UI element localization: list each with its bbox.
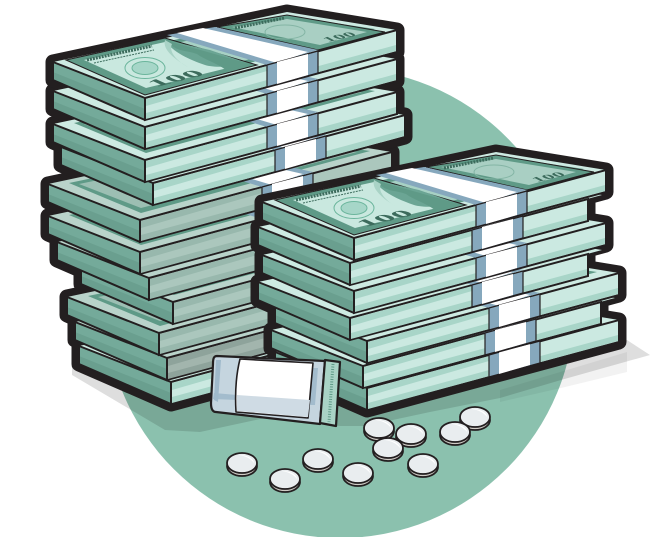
lower bundles in shade: [48, 134, 425, 404]
right money stack: [258, 152, 619, 410]
upper bundles: [53, 41, 405, 205]
lower bundles: [258, 177, 619, 410]
ground shadow: [72, 340, 650, 432]
top bundle with banknote: [262, 152, 606, 260]
bottle label: [236, 359, 313, 418]
bottle cap: [320, 360, 340, 426]
left money stack: [48, 12, 425, 404]
icon: tipped pill bottle: [211, 356, 340, 426]
bottle body: [211, 356, 325, 424]
top bundle with banknote: [53, 12, 397, 120]
background circle: [105, 68, 575, 537]
stack outline: [258, 152, 619, 410]
pills: [227, 407, 490, 492]
stack outline: [48, 12, 425, 404]
